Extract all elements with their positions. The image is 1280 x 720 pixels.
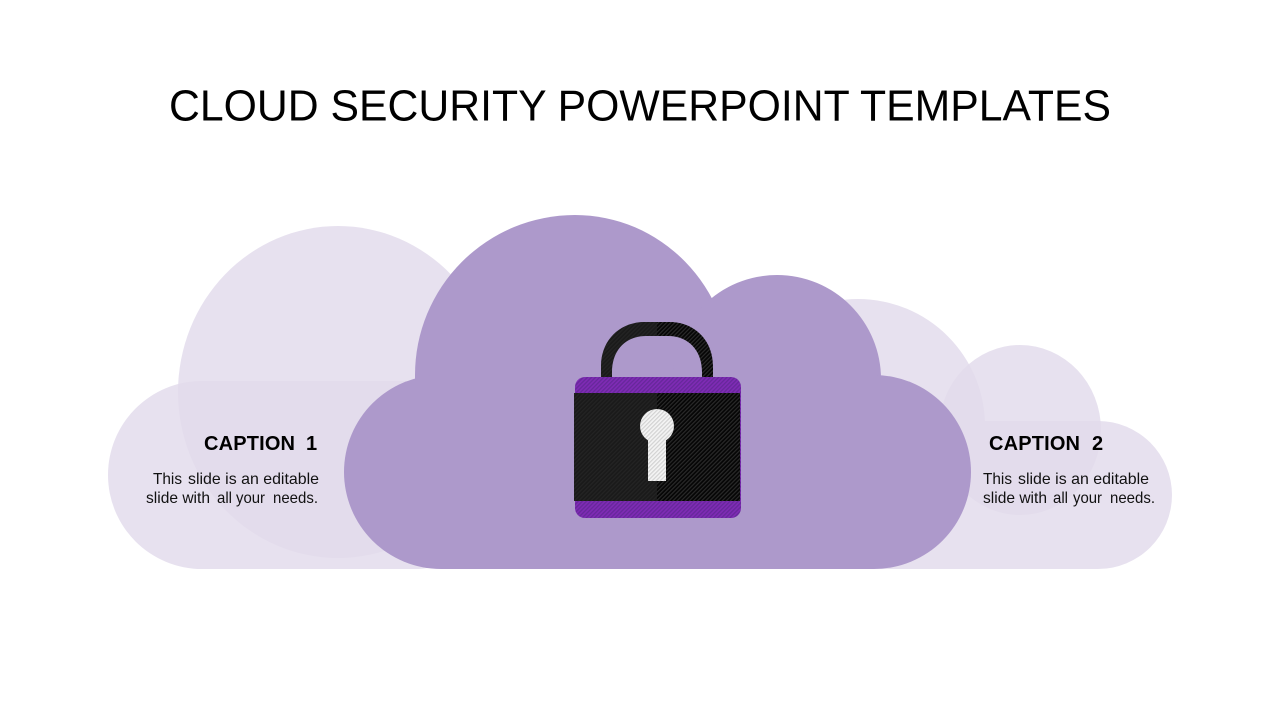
caption 1 heading: CAPTION (204, 433, 295, 455)
left pale cloud (108, 226, 450, 569)
caption 2 body (983, 471, 1155, 507)
icon: padlock (574, 322, 741, 518)
caption 2 body: all (1053, 490, 1068, 507)
right pale cloud (844, 299, 1172, 569)
central cloud (344, 215, 971, 569)
caption 1 body: slide with (146, 490, 210, 507)
caption 1 body (146, 471, 319, 507)
caption 2 body: This (983, 471, 1012, 488)
caption 2 body: slide is an editable (1018, 471, 1149, 488)
caption 2 heading: CAPTION (989, 433, 1080, 455)
padlock shackle (601, 322, 713, 378)
caption 1 body: This (153, 471, 182, 488)
caption 2 body: needs. (1110, 490, 1155, 507)
caption 1 body: slide is an editable (188, 471, 319, 488)
caption 1 heading: 1 (306, 433, 317, 455)
caption 1 (146, 433, 319, 507)
caption 1 body: all (217, 490, 232, 507)
icon: keyhole (640, 409, 674, 481)
caption 2 heading: 2 (1092, 433, 1103, 455)
padlock purple body (575, 377, 741, 518)
caption 1 body: needs. (273, 490, 318, 507)
title: CLOUD SECURITY POWERPOINT TEMPLATES (169, 82, 1111, 130)
caption 2 body: slide with (983, 490, 1047, 507)
caption 2 (983, 433, 1155, 507)
caption 1 body: your (236, 490, 266, 507)
caption 2 body: your (1073, 490, 1103, 507)
padlock black band (574, 393, 740, 501)
